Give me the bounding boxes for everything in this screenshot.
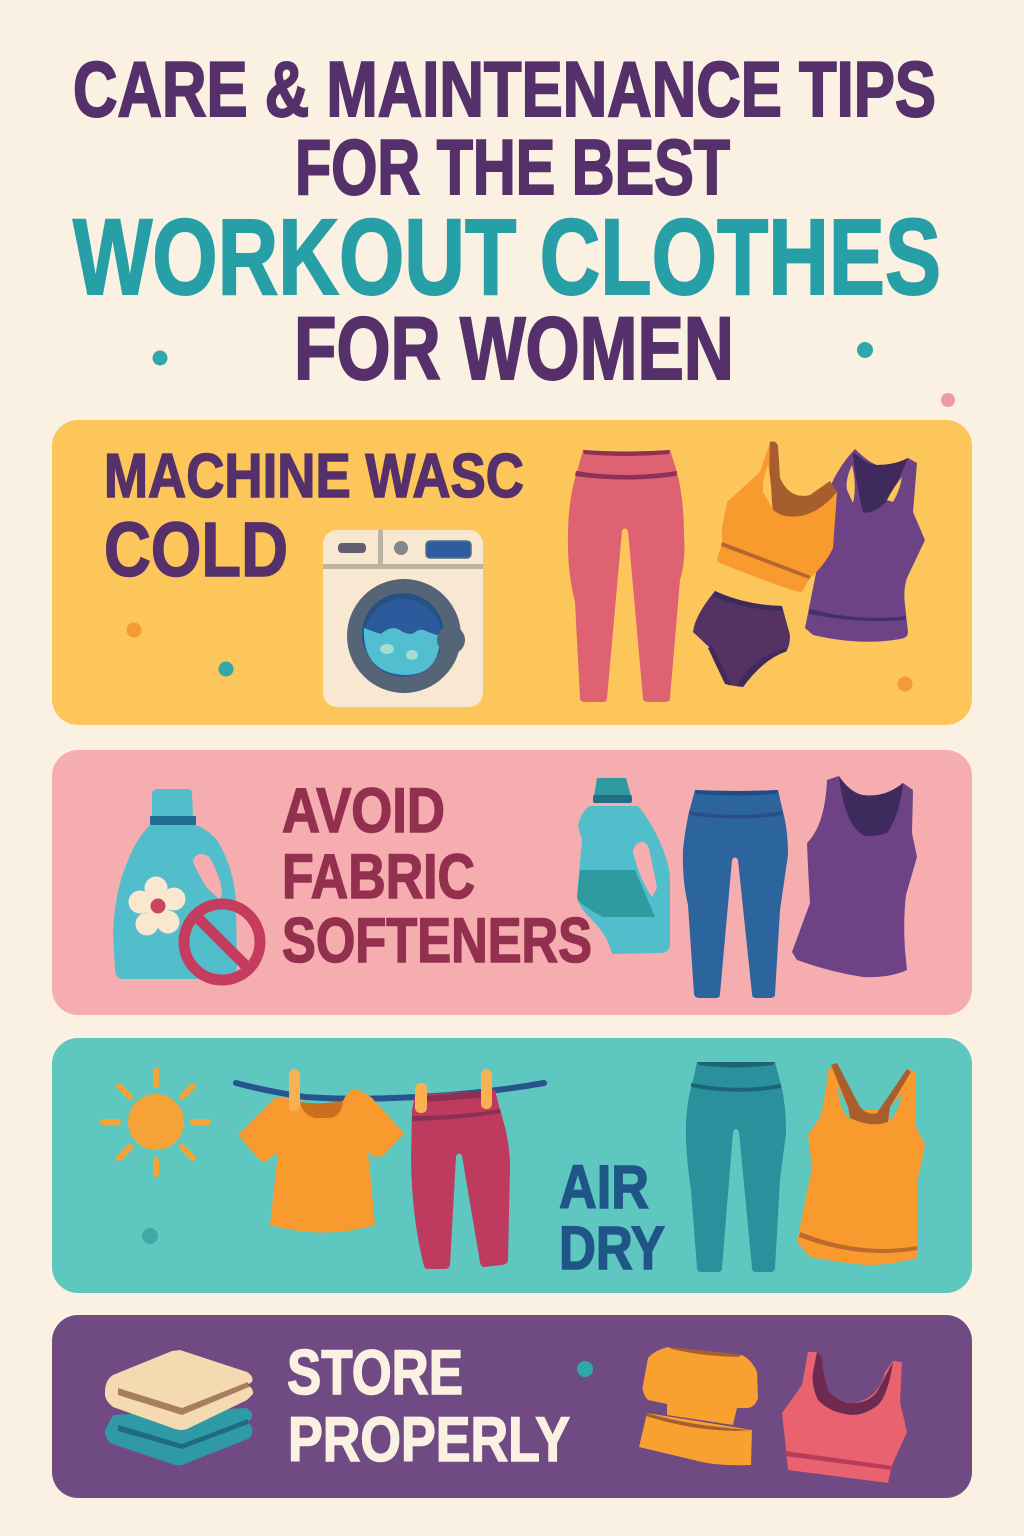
icon: purple tank top [805,449,925,642]
heading: machine wash cold: COLD [104,507,288,593]
panel: avoid fabric softeners [52,750,972,1015]
icon: softener bottle with prohibition sign [113,789,260,980]
icon: hanging red leggings [411,1069,510,1269]
panel: machine wash cold [52,420,972,725]
icon: prohibition sign [184,904,260,980]
panel: air dry [52,1038,972,1293]
heading: air dry: AIR [559,1153,649,1221]
heading: machine wash cold: MACHINE WASC [104,442,524,511]
title: FOR WOMEN [294,298,734,398]
heading: avoid fabric softeners: SOFTENERS [282,906,592,976]
icon: flower [128,876,186,936]
heading: avoid fabric softeners [282,776,592,976]
icon: orange t-shirt [238,1069,404,1232]
dots [126,622,912,692]
icon: purple briefs [693,591,790,687]
icon: blue leggings [683,790,788,998]
heading: machine wash cold [104,442,524,593]
icon: sun [103,1070,208,1174]
icon: folded clothes stack [105,1350,253,1465]
icon: teal bottle [577,778,670,954]
decorative dots [152,342,955,407]
icon: orange sports bra [717,442,837,592]
heading: avoid fabric softeners: FABRIC [282,842,475,912]
title [73,45,941,398]
icon: folded orange shirt [639,1347,758,1465]
heading: air dry: DRY [559,1214,665,1282]
heading: avoid fabric softeners: AVOID [282,776,445,846]
icon: clothesline [236,1069,544,1269]
icon: orange tank top [797,1063,925,1265]
icon: pink leggings [568,450,684,702]
heading: air dry [559,1153,665,1282]
icon: pink sports bra [782,1352,907,1483]
icon: purple tank top [792,776,917,977]
icon: washing machine [323,530,483,707]
panel: store properly [52,1315,972,1498]
heading: store properly: PROPERLY [288,1405,570,1475]
icon: teal leggings [686,1062,786,1272]
heading: store properly [287,1338,570,1475]
title: FOR THE BEST [295,123,730,211]
heading: store properly: STORE [287,1338,463,1408]
